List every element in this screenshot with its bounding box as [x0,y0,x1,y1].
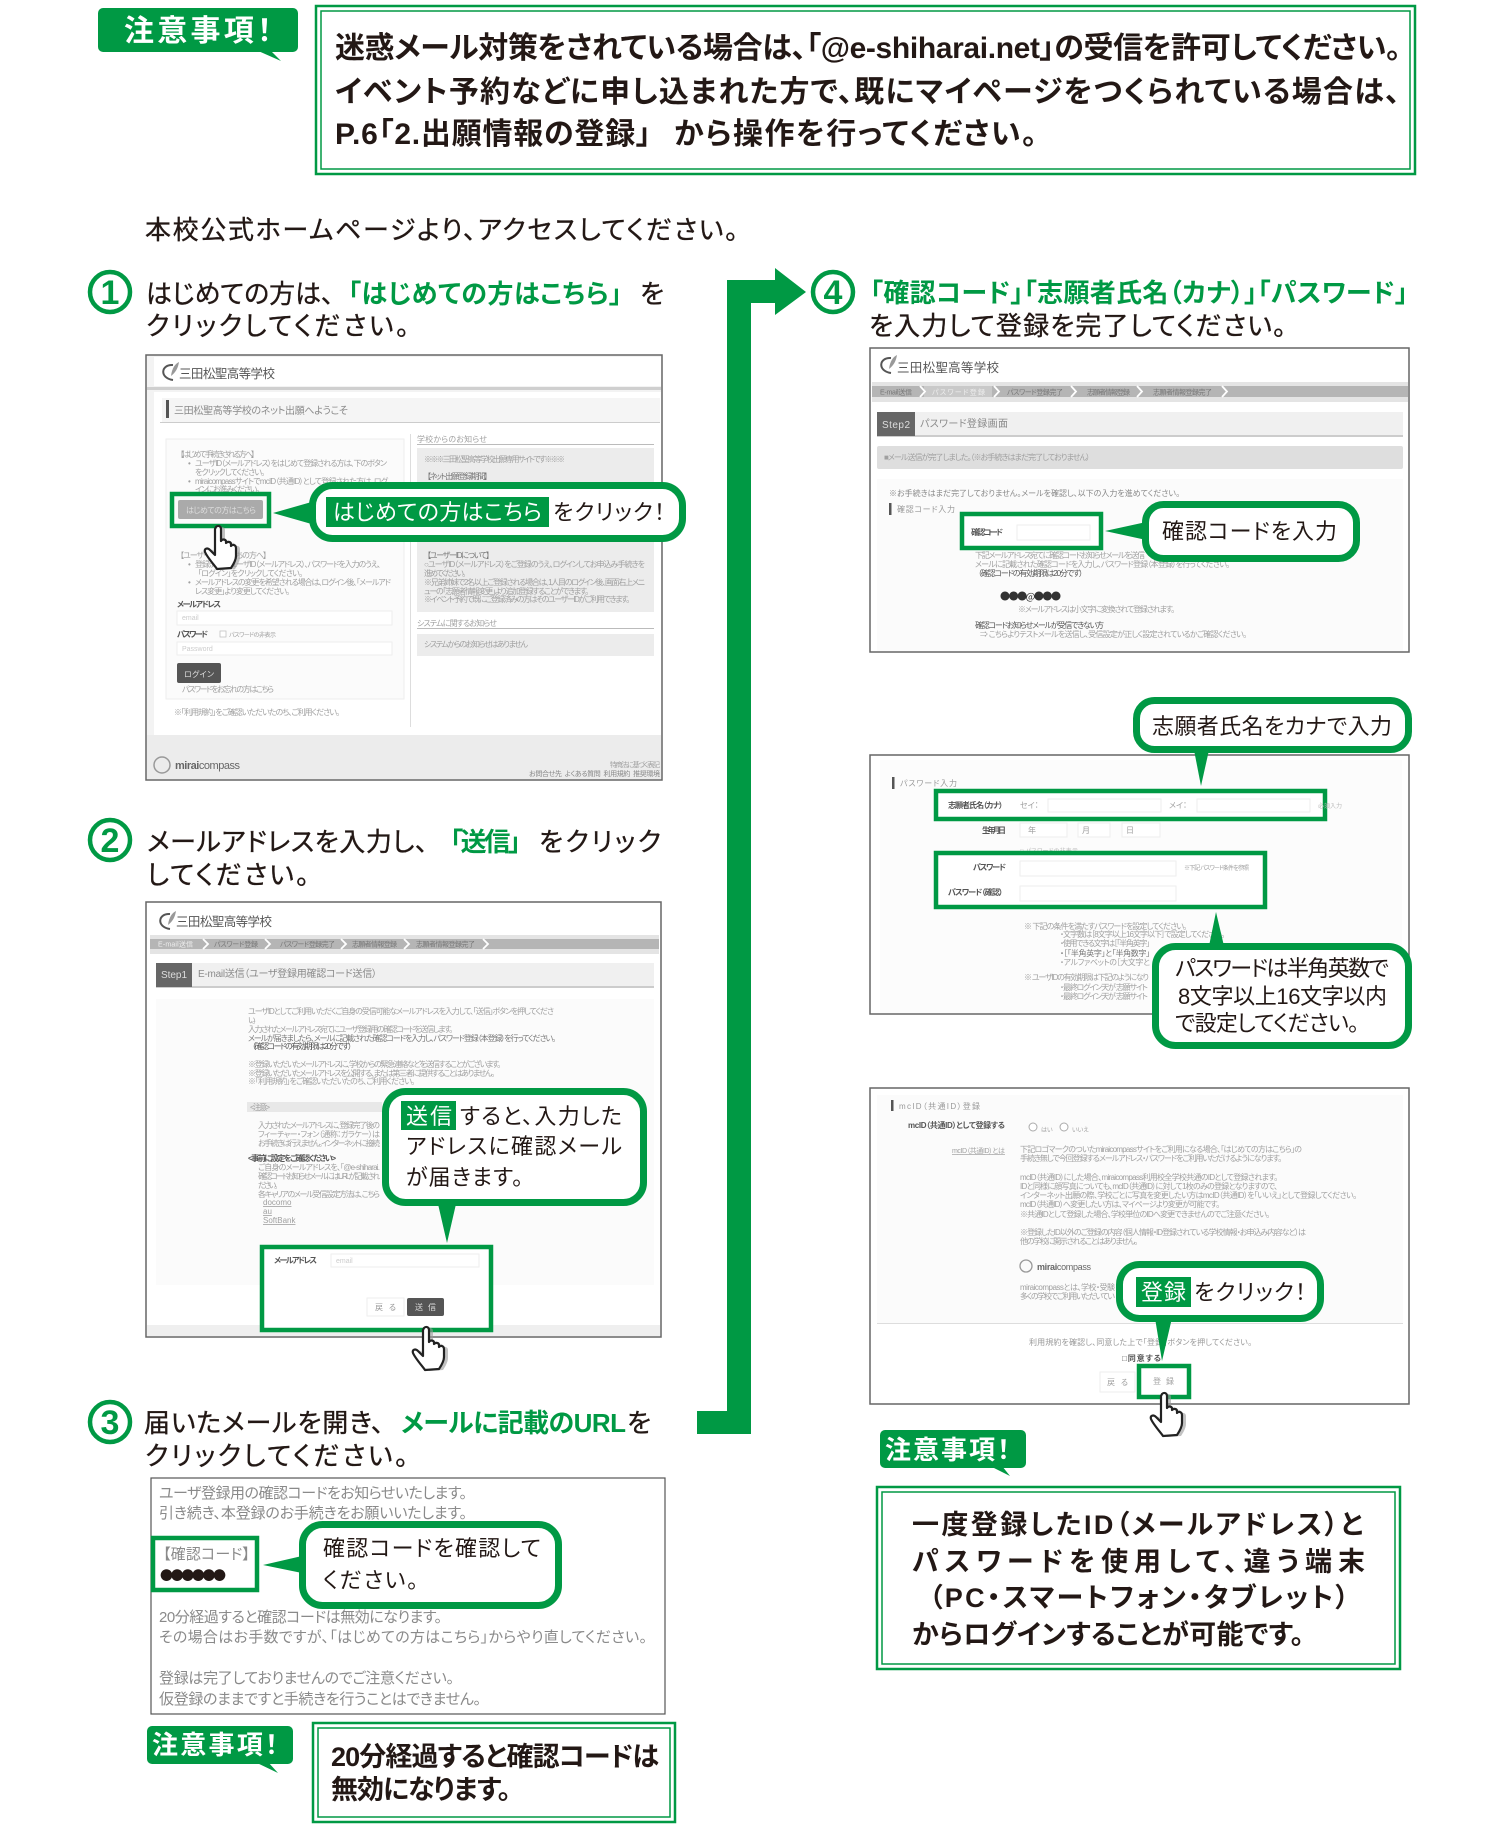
step title 2 [877,412,1403,437]
screenshot 5: password form: 生年月日 [982,825,1006,835]
callout: check confirmation code: 確認コードを確認して [323,1536,541,1561]
notice box: top: から操作を行ってください。 [674,118,1037,151]
form text 4: 確認コードお知らせメールが受信できない方 [975,620,1104,630]
mcID explanation: 他の学校に開示されることはありません。 [1020,1236,1138,1246]
mcID explanation: インターネット出願の際、学校ごとに写真を変更したい方はmcID（共通ID）を「いいえ」として登録してください。 [1020,1190,1357,1200]
notice box: login from other devices [877,1487,1400,1669]
highlight: password inputs: パスワード（確認） [948,887,1003,897]
form text 4: ●●●@●●● [1000,588,1061,603]
screenshot 6: mcID registration: mcID（共通ID）とは [952,1146,1005,1155]
form text 4 [877,479,1403,651]
arrow: step 3 to step 4 [697,268,806,1434]
notice box: login from other devices: 一度登録したID（メールアドレス）と [912,1510,1363,1540]
instructions 2: docomo [263,1198,292,1207]
instructions 2: ※登録いただいたメールアドレスを公開する、または第三者に提供することはありません。 [248,1068,495,1078]
instructions 2: 各キャリアのメール受信設定方法は、こちら [258,1189,380,1199]
radio buttons [1029,1123,1089,1134]
page title 1 [160,398,660,423]
left login panel [166,439,404,717]
step 1 heading: はじめての方は、 [146,279,334,309]
badge: bottom notice [880,1430,1026,1476]
mcID explanation [1020,1144,1357,1246]
step 2 heading [147,827,661,890]
birth date selectors [1020,823,1160,837]
instructions 2: au [263,1207,272,1216]
notice box: code expiry: 20分経過すると確認コードは [331,1742,659,1772]
progress bar 2: 志願者情報登録 [352,940,397,948]
icon: hand pointer 1 [205,526,240,570]
notice box: top: 迷惑メール対策をされている場合は、「@e-shiharai.net」の受信を許可してください。 [335,32,1401,65]
notice box: code expiry [313,1723,675,1822]
left login panel: 「ログイン」をクリックしてください。 [198,568,303,578]
left login panel: パスワードの非表示 [229,631,276,639]
badge: top notice [98,8,298,61]
left login panel: メールアドレス [177,600,221,609]
radio buttons: はい [1041,1127,1053,1134]
step 1 number: 1 [101,274,119,312]
instructions 2: SoftBank [263,1216,296,1225]
left login panel: インにお進みください。 [195,484,260,494]
notice box: top: イベント予約などに申し込まれた方で、既にマイページをつくられている場合は、 [335,76,1400,109]
step 4 heading [869,278,1408,341]
school logo 4 [881,355,999,375]
instructions 2: 確認コードお知らせメールにはURLが記載され [258,1171,380,1181]
step 3 heading: 届いたメールを開き、 [144,1408,384,1438]
screenshot 3: e-mail body [151,1478,665,1714]
right information column: ※※※三田松聖高等学校出願専用サイトです※※※ [424,454,565,464]
password conditions: ・使用できる文字は［「半角英字」 [1060,938,1150,948]
icon: hand pointer 2 [413,1327,448,1371]
left login panel: パスワード [177,630,208,639]
callout: password rule: パスワードは半角英数で [1175,956,1389,981]
password conditions: ・最終ログイン天が 志願サイト [1060,991,1148,1001]
callout: password rule: で設定してください。 [1175,1011,1359,1036]
radio buttons: いいえ [1072,1127,1089,1134]
progress bar 4: パスワード登録 [932,388,985,396]
instructions 2: フィーチャー・フォン（通称：ガラケー）は [258,1129,380,1139]
badge: step 3 notice [147,1726,293,1773]
instructions 2: 入力されたメールアドレス宛てにユーザ登録用の確認コードを送信します。 [248,1024,453,1034]
form text 4: 下記メールアドレス宛てに確認コードお知らせメールを送信 [975,550,1145,560]
right information column: 学校からのお知らせ [417,434,487,444]
mcID explanation: ※登録したID以外のご登録の内容（個人情報・ID登録されている学校情報・お申込み内容など）は [1020,1227,1306,1237]
left login panel: • [188,560,191,569]
right information column: ※イベント予約で既にご登録済みの方はそのユーザーIDがご利用できます。 [424,594,630,604]
left login panel: • [188,578,191,587]
highlight: first-time button [172,494,269,526]
left login panel: email [182,615,199,622]
screenshot 5: password form: パスワード入力 [900,778,957,788]
step 3 number: 3 [101,1404,119,1442]
progress bar 4 [872,382,1408,402]
highlight: confirmation code: ●●●●●● [160,1565,226,1584]
left login panel: 【ユーザーIDをお持ちの方へ】 [180,550,267,560]
back button [1100,1372,1135,1392]
school logo 2 [160,911,272,929]
screenshot 6: mcID registration: 利用規約を確認し、同意した上で「登録」ボタンを押してください。 [1029,1337,1252,1347]
callout: sending confirmation: アドレスに確認メール [406,1134,622,1159]
form text 4: ⇒ こちらよりテストメールを送信し、受信設定が正しく設定されているかご確認ください。 [980,629,1247,639]
miraicompass logo: miraicompass [1037,1262,1092,1272]
left login panel: はじめての方はこちら [186,505,256,515]
left login panel: miraicompassサイトでmcID（共通ID）として登録された方は、ログ [195,476,389,486]
step 2 heading: をクリック [539,827,661,857]
password conditions: ・最終ログイン天が 志願サイト [1060,982,1148,992]
step 2 number: 2 [101,822,119,860]
school logo 1 [163,362,275,381]
instructions 2: お手続きは行えません。インターネットに接続 [258,1138,380,1148]
callout: check confirmation code: ください。 [323,1568,418,1593]
birth date selectors: 日 [1126,826,1134,835]
step title 2: Step2 [882,420,910,431]
miraicompass logo [1020,1260,1092,1272]
step 4 number: 4 [824,274,843,312]
school logo 2: 三田松聖高等学校 [176,914,272,929]
callout: sending confirmation: 送信 [406,1104,452,1129]
highlight: address and send button: email [336,1258,353,1265]
progress bar 2 [150,935,659,954]
mcID explanation: ※共通IDとして登録した場合、学校単位のIDへ変更できませんのでご注意ください。 [1020,1209,1270,1219]
password conditions: ※ ユーザIDの有効期限は下記のようになり [1024,972,1149,982]
progress bar 2: 志願者情報登録完了 [416,940,475,948]
right information column: ※兄弟姉妹で2名以上ご登録される場合は、1人目のログイン後、画面右上メニ [424,577,645,587]
notice box: top: P.6「2.出願情報の登録」 [335,118,651,151]
school logo 4: 三田松聖高等学校 [897,360,999,375]
instructions 2: （確認コードの有効期限は20分です） [252,1041,352,1051]
screenshot 6: mcID registration: mcID（共通ID）登録 [899,1101,980,1111]
screenshot 3: e-mail body: 20分経過すると確認コードは無効になります。 [159,1609,442,1626]
step 3 heading: を [627,1408,651,1438]
step 1 heading: 「はじめての方はこちら」 [348,279,622,309]
mcID explanation: IDと同様に顔写真についても、mcID（共通ID）に対して1枚のみの登録となりますので、 [1020,1181,1278,1191]
highlight: confirmation code: 【確認コード】 [163,1546,250,1563]
highlight: confirmation code [153,1538,257,1590]
step 4 heading: を入力して登録を完了してください。 [869,311,1286,341]
callout: click register [1120,1264,1320,1361]
highlight: confirmation code input [962,514,1101,548]
step 3 number [90,1402,130,1442]
highlight: address and send button: メールアドレス [274,1256,317,1265]
step 2 heading: 「送信」 [450,827,521,857]
instructions 2: メールが届きましたら、メールに記載された確認コードを入力し、パスワード登録（本登録）を行ってください。 [248,1033,556,1043]
step 3 heading [144,1408,651,1471]
progress bar 4: 志願者情報登録 [1087,388,1130,396]
instructions 2: ださい。 [258,1181,278,1190]
right information column: 進めてください。 [424,568,466,578]
progress bar 2: パスワード登録完了 [280,940,335,948]
callout: click first-time button: はじめての方はこちら [333,500,542,525]
callout: sending confirmation: が届きます。 [406,1165,523,1190]
instructions 2: ※「利用規約」をご確認いただいたのち、ご利用ください。 [248,1076,415,1086]
footer 1: 特商法に基づく表記 [610,760,660,769]
progress bar 2: E-mail送信 [158,940,193,948]
callout: password rule: 8文字以上16文字以内 [1178,984,1387,1009]
progress bar 4: パスワード登録完了 [1007,388,1063,396]
badge: step 3 notice: 注意事項！ [152,1730,278,1760]
highlight: register button [1139,1366,1189,1397]
back button: 戻 る [1107,1378,1128,1387]
progress bar 2: パスワード登録 [214,940,258,948]
notice box: login from other devices: からログインすることが可能です。 [912,1619,1304,1650]
intro text: 本校公式ホームページより、アクセスしてください。 [145,215,738,245]
right information column: ューの「志願者情報変更」より追加登録することができます。 [424,586,589,596]
notice box: login from other devices: パスワードを使用して、違う端末 [912,1547,1365,1577]
highlight: password inputs [936,853,1265,907]
screenshot 2: e-mail send [146,902,661,1337]
grey notice: ■メール送信が完了しました。（※お手続きはまだ完了しておりません） [884,452,1090,462]
instructions 2 [156,999,654,1285]
progress bar 4: E-mail送信 [880,388,912,396]
password conditions [1024,921,1225,1001]
left login panel: 【はじめて手続きされる方へ】 [180,449,255,459]
highlight: confirmation code input: 確認コード [971,527,1003,537]
mcID explanation: mcID（共通ID）にした場合、miraicompass利用校全学校共通のIDとして登録されます。 [1020,1172,1278,1182]
left login panel: Password [182,646,213,653]
callout: sending confirmation [386,1092,644,1243]
left login panel: をクリックしてください。 [195,468,265,477]
step title 2: パスワード登録画面 [920,417,1008,430]
screenshot 5: password form: □ パスワードの非表示 [1020,847,1078,855]
right information column: システムに関するお知らせ [417,618,497,628]
screenshot 3: e-mail body: 引き続き、本登録のお手続きをお願いいたします。 [159,1505,467,1522]
password conditions: ・［「半角英字」と「半角数字」 [1060,948,1150,958]
instructions 2: い。 [248,1016,256,1025]
left login panel: 登録済みのユーザID（メールアドレス）、パスワードを入力のうえ、 [195,559,381,569]
instructions 2: <事前に設定をご確認ください> [248,1153,336,1163]
birth date selectors: 月 [1082,826,1090,835]
screenshot 3: e-mail body: その場合はお手数ですが、「はじめての方はこちら」からやり直してください。 [159,1629,647,1646]
notice box: code expiry: 無効になります。 [331,1775,511,1805]
step 2 heading: してください。 [147,860,309,890]
form text 4: ※メールアドレスは小文字に変換されて登録されます。 [1018,604,1175,614]
step 3 heading: クリックしてください。 [145,1441,408,1471]
instructions 2: 入力されたメールアドレスに、登録完了後の [258,1120,380,1130]
step title 1: Step1 [161,970,187,981]
highlight: password inputs: ※下記 パスワード条件を参照 [1184,864,1249,872]
notice box: login from other devices: （PC・スマートフォン・タブレット） [929,1582,1349,1613]
screenshot 4: password step [870,348,1409,652]
left login panel: • [188,477,191,486]
right information column: ○ユーザID（メールアドレス）をご登録のうえ、ログインしてお申込み手続きを [424,559,646,569]
callout: sending confirmation: すると、入力した [460,1104,622,1129]
icon: hand pointer 3 [1151,1393,1186,1437]
form text 4: （確認コードの有効期限は20分です） [978,568,1083,578]
highlight: address and send button: 送 信 [415,1302,436,1312]
screenshot 3: e-mail body: 仮登録のままですと手続きを行うことはできません。 [159,1691,481,1708]
screenshot 3: e-mail body: 登録は完了しておりませんのでご注意ください。 [159,1670,454,1687]
step title 1 [156,963,654,988]
left login panel: パスワードをお忘れの方はこちら [182,684,274,694]
mcID explanation: 手続き無しで今回登録するメールアドレス・パスワードをご利用いただけるようになります。 [1020,1153,1282,1163]
callout: check confirmation code [263,1524,558,1606]
screenshot 6: mcID registration [870,1088,1409,1404]
birth date selectors: 年 [1028,825,1036,835]
left login panel: メールアドレスの変更を希望される場合は、ログイン後、「メールアド [195,577,391,587]
footer 1: miraicompass [175,760,240,772]
password conditions: ※ 下記の条件を満たすパスワードを設定してください。 [1024,921,1187,931]
instructions 2: ユーザIDとしてご利用いただくご自身の受信可能なメールアドレスを入力して、「送信」ボタンを押してくださ [248,1006,554,1016]
footer 1 [147,735,661,779]
highlight: password inputs: パスワード [973,863,1006,872]
highlight: applicant name in kana: メイ： [1169,801,1187,810]
callout: kana name: 志願者氏名をカナで入力 [1152,714,1392,739]
screenshot 6: mcID registration: mcID（共通ID）として登録する [908,1120,1005,1130]
left login panel: ログイン [184,669,214,679]
instructions 2: ご自身のメールアドレスを、「@e-shiharai. [258,1162,380,1172]
highlight: applicant name in kana: セイ： [1020,801,1039,810]
step 4 heading: 「確認コード」「志願者氏名（カナ）」「パスワード」 [870,278,1408,308]
callout: click register: 登録 [1141,1280,1186,1305]
left login panel: レス変更」より変更してください。 [195,586,290,596]
right information column: システムからのお知らせはありません [424,639,528,649]
highlight: applicant name in kana: 志願者氏名（カナ） [948,800,1003,810]
step 1 heading: クリックしてください。 [146,311,409,341]
password conditions: ・アルファベットの［大文字と [1060,957,1150,967]
mcID explanation: 下記ロゴマークのついたmiraicompassサイトをご利用になる場合、「はじめての方はこちら」の [1020,1144,1302,1154]
footer 1: お問合せ先 よくある質問 利用規約 推奨環境 [529,769,660,778]
step 3 heading: メールに記載のURL [401,1408,626,1438]
right information column [410,434,654,727]
step 2 heading: メールアドレスを入力し、 [147,827,428,857]
callout: kana name [1136,700,1408,786]
step 4 number [813,272,853,312]
grey notice [877,446,1403,469]
highlight: applicant name in kana [936,791,1325,819]
step title 1: E-mail送信（ユーザ登録用確認コード送信） [198,967,377,980]
progress bar 4: 志願者情報登録完了 [1153,388,1212,396]
step 1 heading [146,279,664,341]
instructions 2: <注意> [250,1102,270,1112]
callout: click first-time button [273,486,682,538]
highlight: register button: 登 録 [1153,1376,1174,1386]
form text 4: メールに記載された確認コードを入力し、パスワード登録（本登録）を行ってください。 [975,559,1230,569]
mcID explanation: mcID（共通ID）へ変更したい方は、マイページより変更が可能です。 [1020,1199,1220,1209]
callout: password rule [1156,912,1408,1046]
callout: enter confirmation code: 確認コードを入力 [1162,519,1337,544]
screenshot 1: top page [146,355,662,780]
required input note: 必須入力 [1318,802,1342,810]
screenshot 5: password form [870,755,1409,1014]
password conditions: ・文字数は［8文字以上16文字以下］で設定してください。 [1060,929,1225,939]
page title 1: 三田松聖高等学校のネット出願へようこそ [174,404,348,417]
form text 4: 確認コード入力 [897,504,955,514]
left login panel: ※「利用規約」をご確認いただいたのち、ご利用ください。 [174,707,340,717]
step 2 number [90,820,130,860]
left login panel: ユーザID（メールアドレス）をはじめて登録される方は、下のボタン [195,458,387,468]
callout: click first-time button: をクリック！ [553,500,665,525]
school logo 1: 三田松聖高等学校 [179,366,275,381]
right information column: 【ネット出願登録期間】 [427,471,488,481]
right information column: 【ユーザーIDについて】 [427,551,490,560]
callout: click register: をクリック！ [1194,1280,1306,1305]
screenshot 3: e-mail body: ユーザ登録用の確認コードをお知らせいたします。 [159,1485,467,1502]
highlight: address and send button: 戻 る [375,1303,396,1312]
screenshot 6: mcID registration: 多くの学校でご利用いただいてい [1020,1291,1115,1301]
screenshot 6: mcID registration: miraicompassとは、学校・受験 [1020,1282,1115,1292]
highlight: address and send button [262,1247,491,1330]
badge: top notice: 注意事項！ [124,15,272,48]
callout: enter confirmation code [1105,504,1356,558]
form text 4: ※お手続きはまだ完了しておりません。メールを確認し、以下の入力を進めてください。 [889,488,1180,498]
screenshot 6: mcID registration: □同意する [1122,1353,1161,1363]
notice box: top [316,6,1415,174]
instructions 2: ※登録いただいたメールアドレスに、学校からの緊急連絡などを送信することがございます。 [248,1059,501,1069]
step 1 heading: を [640,279,664,309]
badge: bottom notice: 注意事項！ [885,1435,1010,1465]
left login panel: • [188,459,191,468]
step 1 number [90,272,130,312]
